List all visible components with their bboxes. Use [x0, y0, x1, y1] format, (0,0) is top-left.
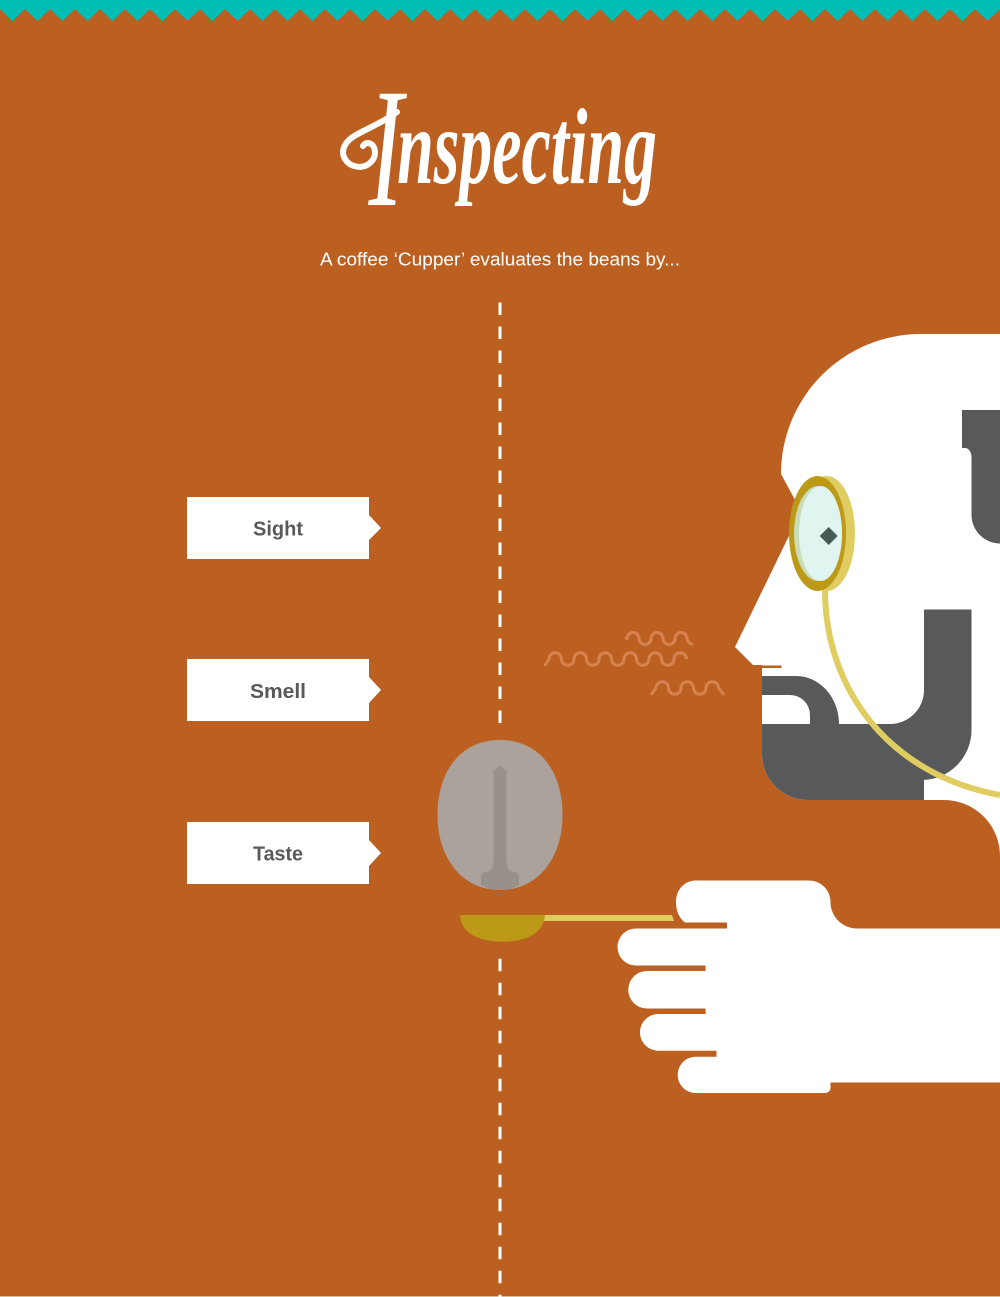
label: Smell: Smell — [250, 681, 306, 703]
spoon — [460, 915, 674, 942]
label: Taste: Taste — [253, 844, 303, 866]
title: I — [368, 55, 407, 242]
face — [735, 334, 1000, 856]
monocle — [789, 476, 855, 591]
hair — [962, 410, 1000, 544]
title: nspecting — [397, 88, 657, 207]
hand — [618, 880, 1000, 1093]
smell waves — [544, 632, 724, 695]
monocle pupil — [820, 527, 838, 545]
label: Sight: Sight — [253, 518, 303, 540]
coffee bean — [438, 740, 562, 890]
zigzag top border — [0, 0, 1000, 21]
title flourish — [343, 112, 397, 167]
label: Smell — [187, 659, 381, 721]
lip — [753, 666, 782, 668]
monocle cord — [825, 590, 1000, 795]
label: Taste — [187, 822, 381, 884]
beard — [762, 610, 972, 800]
head — [735, 334, 1000, 856]
subtitle: A coffee ‘Cupper’ evaluates the beans by... — [320, 250, 680, 270]
dashed centre line — [498, 302, 502, 1297]
label: Sight — [187, 497, 381, 559]
